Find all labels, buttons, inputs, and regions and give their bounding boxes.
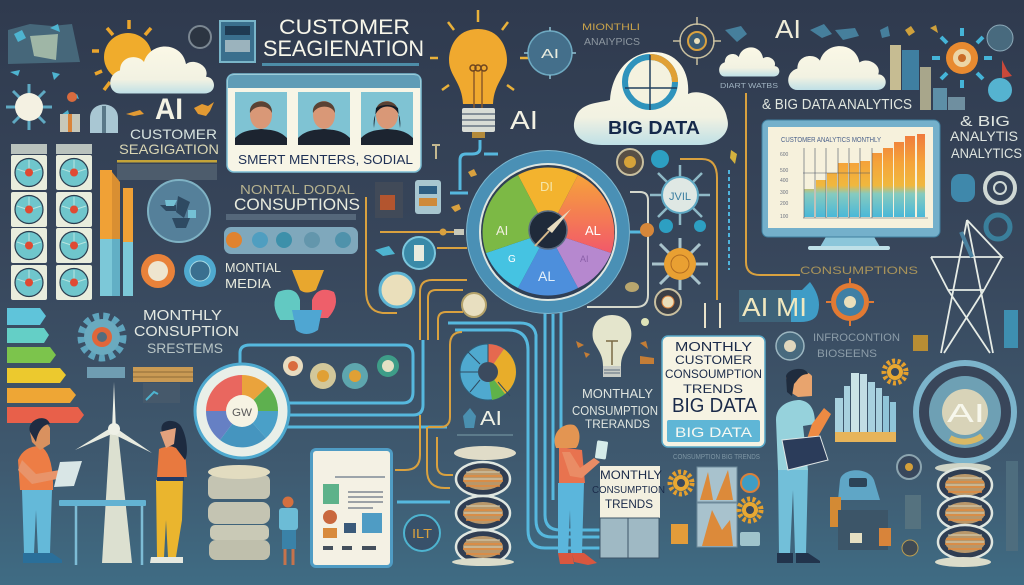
title: CUSTOMER [279, 16, 410, 39]
icon: JVIL gear [650, 165, 710, 225]
database stack [208, 465, 270, 560]
small person [279, 496, 298, 565]
donut chart: small multi ring [460, 344, 516, 400]
heading: big analytics right: & BIG [960, 113, 1010, 130]
panel: big data card [662, 336, 765, 447]
icon: orange sun gear [932, 25, 1013, 102]
label: AI beside bulb: AI [510, 105, 538, 135]
title [262, 16, 424, 66]
panel: big data card: CUSTOMER [675, 353, 752, 367]
gauge segments [483, 168, 614, 295]
striped sign [87, 367, 193, 403]
gauge labels: AL [585, 223, 601, 238]
big data button [667, 420, 760, 442]
icon: window panel [220, 21, 255, 62]
icons: orange and blue badges [141, 254, 216, 288]
caption: SMERT MENTERS, SODIAL [238, 152, 413, 167]
pill: AI MI [739, 282, 819, 322]
panel: big data card: CONSOUMPTION [665, 367, 762, 381]
icon: orange gear upper [884, 361, 906, 383]
small icons near white sun [60, 26, 214, 133]
icon: blue disc [148, 180, 210, 242]
badge: AI ring: AI [947, 398, 985, 428]
label: AI small [457, 408, 513, 436]
heading: AI customer segmentation: AI [155, 93, 183, 126]
gauge labels: DI [540, 179, 553, 194]
gauge labels: AL [538, 268, 555, 284]
icon: JVIL gear: JVIL [669, 191, 691, 203]
label: monthly analytics: ANAIYPICS [584, 37, 640, 48]
badge: AI ring [913, 360, 1017, 464]
icon: gear [81, 316, 123, 358]
chart title: CUSTOMER ANALYTICS MONTHLY [781, 137, 881, 144]
card: consumption trends: MONTHLY [600, 468, 662, 482]
gauge labels: G [508, 254, 516, 265]
card: consumption trends: CONSUMPTION [592, 484, 665, 496]
label and small clouds top right [719, 14, 886, 90]
panel: big data card: BIG DATA [675, 424, 753, 440]
heading: big analytics right [950, 113, 1022, 161]
skyline chart [890, 45, 965, 110]
label: AI small: AI [480, 408, 502, 430]
heading: monthly consumption systems: CONSUPTION [134, 323, 239, 340]
label: monthly analytics: MIONTHLI [582, 22, 640, 32]
machine icons bottom right [830, 455, 1018, 556]
panel: big data cloud [574, 52, 728, 145]
person: standing man [776, 369, 831, 563]
pill: status icons [224, 227, 358, 254]
panel: tiled meters [11, 144, 92, 300]
heading: monthly consumption trends: MONTHALY [582, 386, 653, 401]
icon: AI disc: AI [541, 46, 559, 61]
round badges middle left [375, 145, 477, 307]
icon: data target [625, 55, 677, 110]
bar chart: sky bars [835, 373, 896, 442]
heading: big analytics right: ANALYTIS [950, 128, 1018, 144]
label: monthly analytics [582, 22, 640, 48]
heading: AI customer segmentation: CUSTOMER [130, 126, 217, 142]
heading: monthly media: MONTIAL [225, 260, 281, 275]
label: consumption blurred: BIOSEENS [817, 348, 877, 360]
card: consumption trends: TRENDS [605, 497, 653, 511]
scattered icons top right [725, 24, 938, 42]
panel: customer profiles [227, 74, 421, 172]
label: consumption blurred: INFROCONTION [813, 332, 900, 344]
small round icons around gauge [617, 149, 737, 292]
heading: monthly consumption trends: CONSUMPTION [572, 403, 658, 418]
person: man with tablet [18, 418, 82, 563]
heading: monthly consumption trends [572, 386, 658, 431]
heading: monthly consumption systems: MONTHLY [143, 307, 222, 324]
heading: AI customer segmentation [117, 93, 219, 180]
icon: sun behind cloud [92, 20, 214, 94]
tablet [310, 448, 393, 568]
title: SEAGIENATION [263, 36, 424, 61]
person: woman in yellow [150, 421, 187, 563]
heading: monthly consumptions: NONTAL DODAL [240, 182, 355, 197]
gauge [466, 150, 630, 314]
heading: monthly consumptions [226, 182, 360, 220]
coil stack: left [452, 446, 516, 566]
gauge labels [496, 179, 601, 284]
icons: right column [951, 173, 1018, 348]
gauge hub and needle [529, 211, 567, 249]
y axis ticks [780, 152, 789, 220]
heading: monthly media: MEDIA [225, 276, 271, 291]
chart: segmented blob [274, 270, 336, 334]
icon collage: top left [8, 24, 80, 80]
chart bars [804, 134, 925, 217]
badge: ILT ring: ILT [412, 526, 432, 541]
pill: AI MI: AI MI [742, 292, 807, 322]
icon: transmission tower [931, 220, 1002, 353]
y axis ticks: 600 [780, 152, 789, 158]
icons on pipe panel [283, 355, 399, 389]
icon: AI disc [524, 27, 576, 79]
donut chart: color wheel [195, 364, 289, 458]
icon: orange gear [652, 238, 708, 290]
monitor: bar chart [762, 120, 940, 250]
y axis ticks: 500 [780, 168, 789, 174]
y axis ticks: 400 [780, 178, 789, 184]
profile photo two [298, 92, 350, 145]
wind turbine and table [59, 382, 152, 565]
heading: monthly consumptions: CONSUPTIONS [234, 195, 360, 214]
donut chart: color wheel: GW [232, 407, 253, 419]
connector pipes [240, 93, 800, 548]
gauge labels: AI [496, 223, 508, 238]
panel: big data card: MONTHLY [675, 339, 752, 354]
heading: monthly consumption trends: TRERANDS [585, 417, 650, 431]
heading: monthly consumption systems [134, 307, 239, 356]
y axis ticks: 100 [780, 214, 789, 220]
label and small clouds top right: DIART WATBS [720, 83, 778, 90]
label: consumptions: CONSUMPTIONS [800, 265, 918, 277]
bar chart: tall bars [100, 170, 133, 296]
person: woman with phone [555, 424, 608, 565]
icon: orange target badge [826, 278, 874, 326]
heading: AI customer segmentation: SEAGIGATION [119, 141, 219, 157]
icon: small chip [375, 180, 441, 218]
profile photo one [235, 92, 287, 145]
y axis ticks: 300 [780, 190, 789, 196]
icon: target wheel [673, 17, 721, 65]
panel: big data card: TRENDS [683, 382, 743, 396]
icon: white sun gear [6, 84, 52, 130]
cloud label: BIG DATA [608, 118, 700, 138]
y axis ticks: 200 [780, 201, 789, 207]
coil stack: right [935, 463, 992, 567]
icon: target dial bottom [462, 289, 804, 360]
legend: energy ratings [7, 308, 84, 423]
panel: big data card: BIG DATA [672, 395, 758, 417]
icon: lightbulb [430, 10, 528, 138]
profile photo three [361, 92, 413, 145]
badge: ILT ring [404, 515, 440, 551]
label and small clouds top right: AI [775, 14, 801, 44]
icon: bulb grey [576, 315, 654, 377]
heading: big data analytics: & BIG DATA ANALYTICS [762, 96, 912, 113]
label: consumption blurred [813, 332, 928, 360]
card: consumption trends [592, 466, 665, 558]
heading: monthly media [225, 260, 281, 291]
small charts bottom center [670, 454, 761, 547]
heading: monthly consumption systems: SRESTEMS [147, 340, 223, 356]
gauge labels: AI [580, 254, 589, 264]
small charts bottom center: CONSUMPTION BIG TRENDS [673, 454, 760, 461]
